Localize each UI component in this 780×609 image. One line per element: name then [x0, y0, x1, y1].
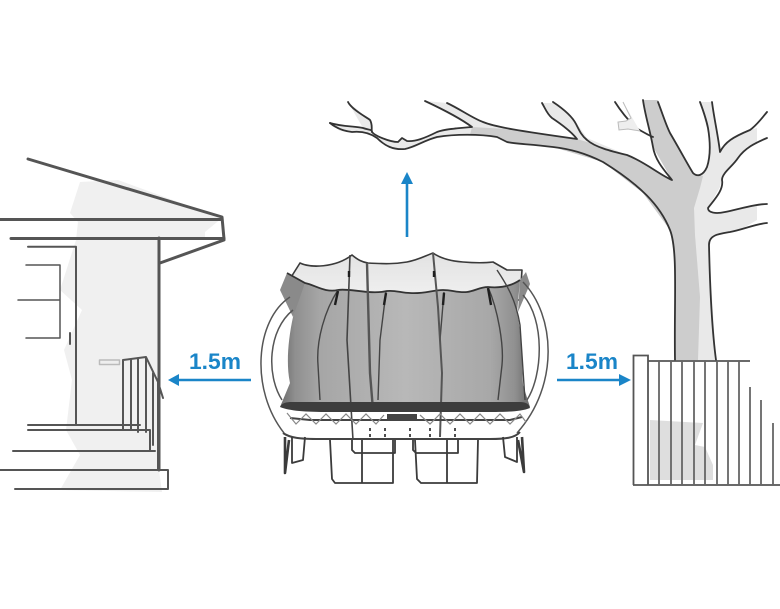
left corner net: [280, 273, 305, 317]
arrow: right: [557, 374, 631, 386]
door: [28, 247, 76, 425]
trunk shading: [470, 100, 703, 360]
enclosure poles: [318, 253, 525, 440]
spring area: [283, 413, 526, 439]
door handle: [69, 333, 71, 344]
arrow: up: [401, 172, 413, 237]
pickets: [659, 361, 773, 485]
house shading: [60, 180, 222, 492]
railing: [123, 357, 163, 470]
fence rails: [633, 361, 780, 485]
tree: [330, 100, 767, 360]
tree outlines: [330, 100, 767, 360]
window: [18, 265, 60, 338]
gate post: [634, 356, 648, 485]
back net: [288, 253, 522, 300]
fence shading: [650, 420, 713, 480]
legs: [285, 428, 524, 483]
tree canopy fill: [330, 100, 757, 360]
outer frame arcs: [261, 282, 548, 433]
label: right 1.5m: 1.5m: [566, 349, 618, 374]
jumping mat: [280, 402, 530, 412]
steps: [0, 425, 168, 489]
label: left 1.5m: 1.5m: [189, 349, 241, 374]
roof: [28, 159, 224, 239]
trampoline: [261, 253, 548, 483]
outer frame rail: [283, 432, 520, 439]
bracket and wall: [159, 238, 224, 470]
front net: [280, 280, 530, 407]
logo pad: [387, 414, 417, 421]
mailbox: [100, 360, 120, 364]
arrow: left: [168, 374, 251, 386]
pole clips: [335, 271, 491, 305]
right corner net: [518, 272, 530, 312]
broken twig: [618, 102, 640, 131]
fence: [633, 356, 780, 485]
house: [0, 159, 224, 492]
